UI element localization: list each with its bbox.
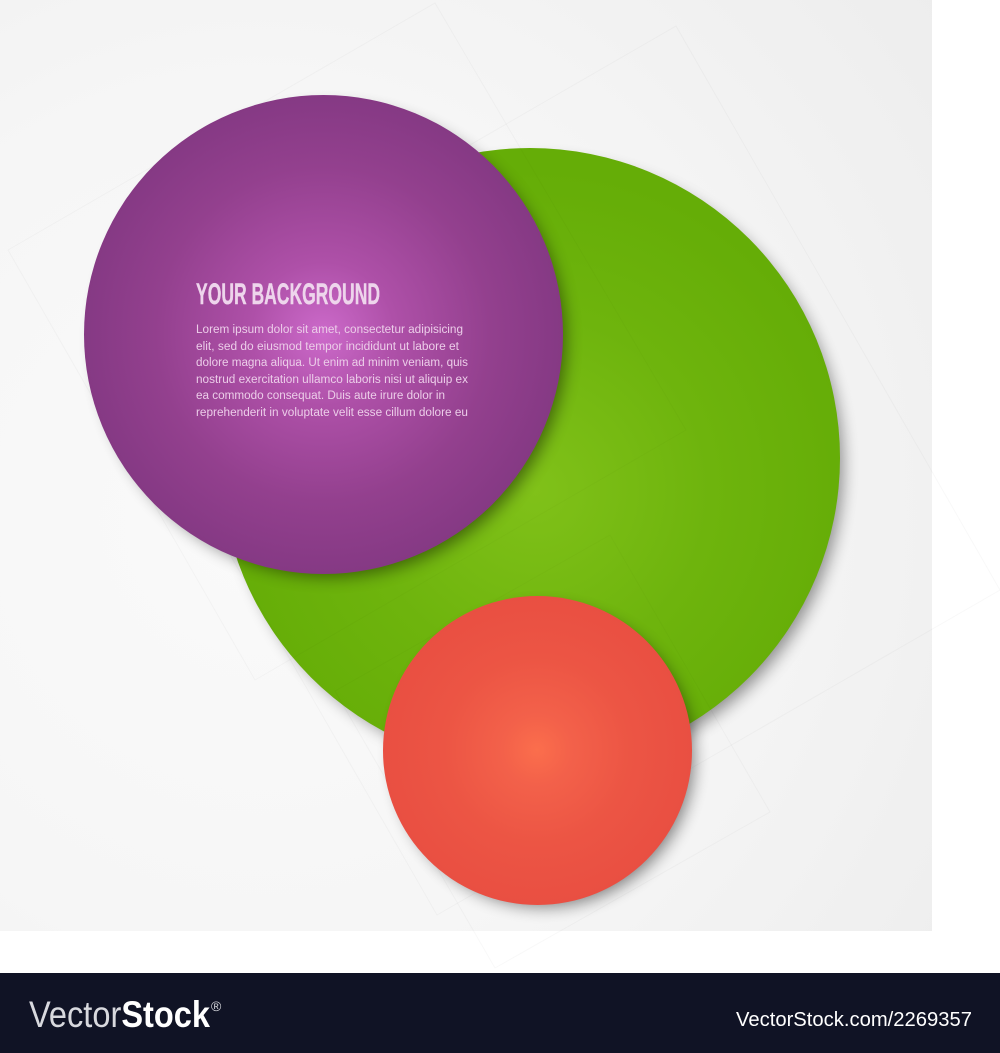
purple circle shadow [96, 107, 566, 577]
heading: YOUR BACKGROUND [196, 278, 380, 311]
body text: reprehenderit in voluptate velit esse cillum dolore eu [196, 407, 468, 419]
green circle [234, 148, 854, 742]
red circle shadow [394, 607, 694, 907]
body text [196, 324, 468, 419]
footer url: VectorStock.com/2269357 [736, 1009, 972, 1031]
green circle shadow [231, 160, 843, 772]
red circle [383, 596, 694, 907]
registered mark: ® [211, 998, 222, 1014]
body text: elit, sed do eiusmod tempor incididunt ut labore et [196, 341, 460, 353]
purple circle [84, 95, 566, 577]
footer bar [0, 973, 1000, 1053]
body text: dolore magna aliqua. Ut enim ad minim veniam, quis [196, 357, 468, 369]
body text: nostrud exercitation ullamco laboris nisi ut aliquip ex [196, 374, 468, 386]
body text: ea commodo consequat. Duis aute irure dolor in [196, 390, 445, 402]
footer logo: VectorStock [29, 994, 210, 1035]
body text: Lorem ipsum dolor sit amet, consectetur adipisicing [196, 324, 463, 336]
